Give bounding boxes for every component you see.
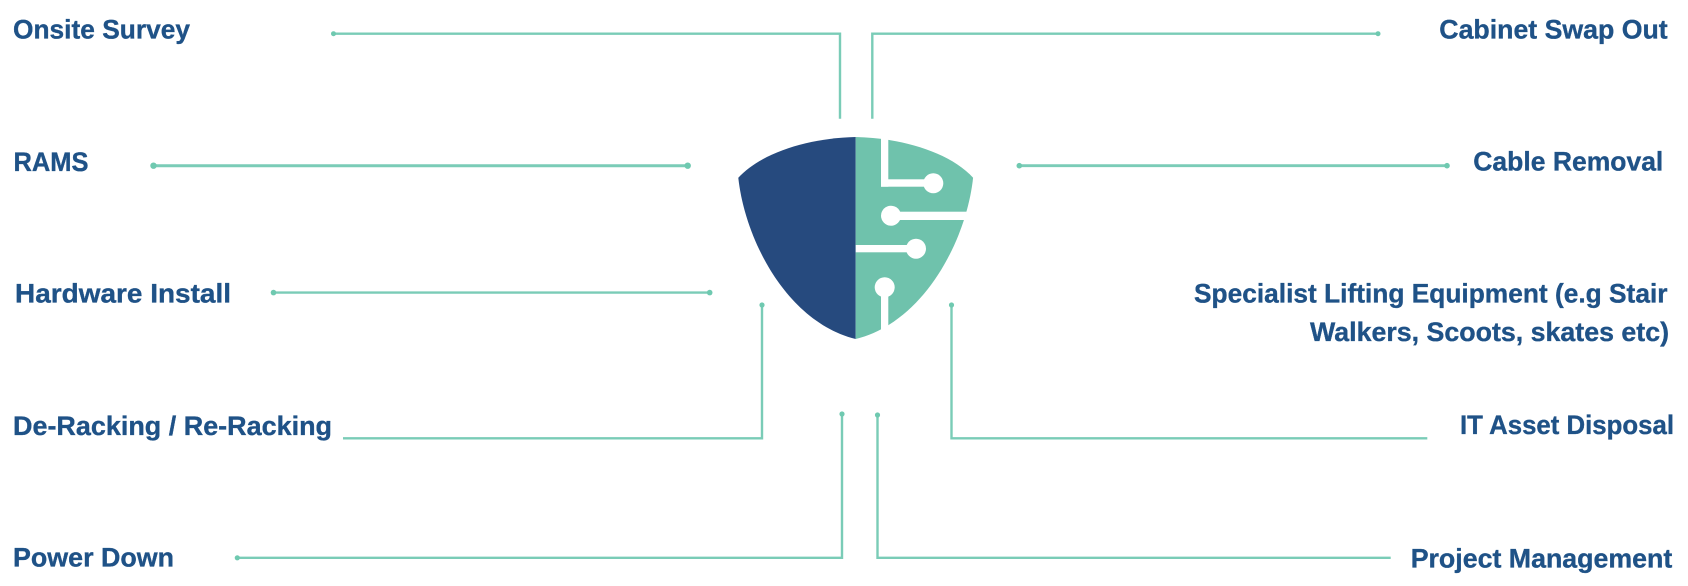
label: De-Racking / Re-Racking: De-Racking / Re-Racking bbox=[13, 411, 332, 441]
label: Specialist Lifting Equipment: Specialist Lifting Equipment (e.g Stair bbox=[1194, 278, 1668, 308]
icon: circuit shield bbox=[738, 130, 985, 340]
connector: De-Racking / Re-Racking bbox=[343, 302, 765, 438]
label: Cable Removal: Cable Removal bbox=[1473, 147, 1663, 177]
label: IT Asset Disposal: IT Asset Disposal bbox=[1460, 410, 1674, 440]
shield right half bbox=[856, 137, 973, 339]
label: Hardware Install: Hardware Install bbox=[15, 279, 231, 309]
label: Specialist Lifting Equipment: Walkers, Scoots, skates etc) bbox=[1310, 317, 1669, 347]
connector: RAMS bbox=[150, 162, 691, 169]
label: Onsite Survey: Onsite Survey bbox=[13, 14, 190, 44]
shield left half bbox=[738, 137, 856, 339]
connector: Cabinet Swap Out bbox=[872, 31, 1380, 119]
label: Power Down: Power Down bbox=[13, 543, 174, 573]
label: RAMS: RAMS bbox=[14, 147, 88, 177]
label: Specialist Lifting Equipment bbox=[1194, 278, 1669, 347]
connector: Onsite Survey bbox=[331, 31, 840, 119]
connector: IT Asset Disposal bbox=[949, 302, 1427, 438]
connector: Power Down bbox=[235, 411, 845, 560]
circuit traces bbox=[856, 130, 985, 340]
label: Cabinet Swap Out: Cabinet Swap Out bbox=[1439, 15, 1668, 45]
label: Project Management: Project Management bbox=[1411, 543, 1672, 573]
connector: Project Management bbox=[875, 412, 1391, 558]
connector: Hardware Install bbox=[271, 290, 712, 295]
connector: Cable Removal bbox=[1016, 163, 1450, 168]
